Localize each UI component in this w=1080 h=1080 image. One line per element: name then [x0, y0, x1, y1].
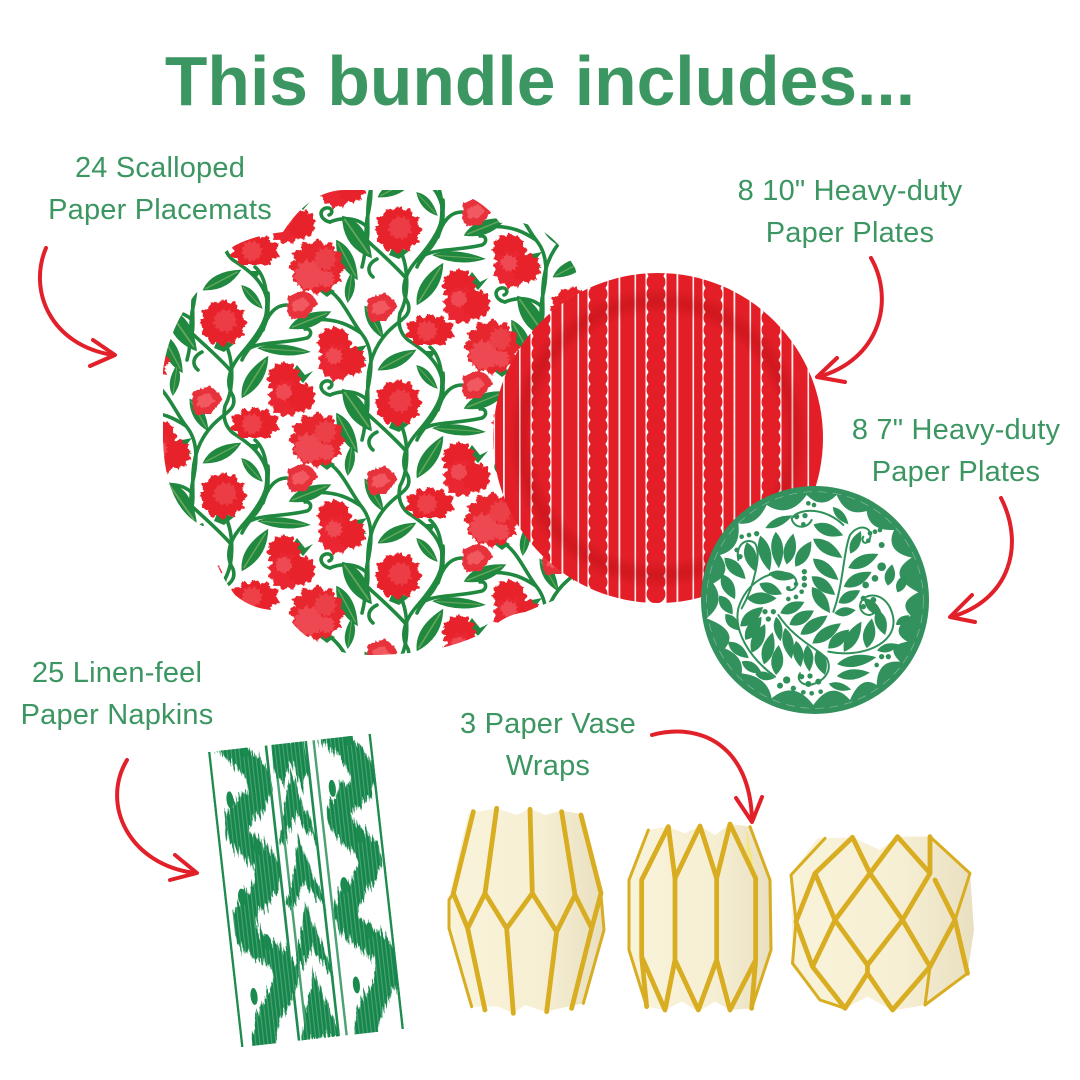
arrow: to placemats	[40, 248, 115, 366]
label: vase wraps: Wraps	[506, 750, 590, 782]
label: napkins: Paper Napkins	[21, 699, 213, 731]
arrow: to 10 inch plate	[817, 258, 882, 382]
plate: green fern 7 inch	[701, 486, 929, 714]
label: 7 inch plates: Paper Plates	[872, 456, 1040, 488]
label: 7 inch plates: 8 7" Heavy-duty	[852, 414, 1060, 446]
vase 3	[791, 837, 974, 1011]
label: placemats	[48, 152, 272, 226]
label: vase wraps	[460, 708, 636, 782]
label: 7 inch plates	[852, 414, 1060, 488]
napkin: green ikat	[207, 722, 405, 1060]
label: 10 inch plates: Paper Plates	[766, 217, 934, 249]
plate: red striped 10 inch	[490, 270, 826, 606]
label: 10 inch plates	[738, 175, 963, 249]
title: This bundle includes...	[165, 42, 915, 120]
vase 1	[449, 808, 604, 1013]
label: placemats: 24 Scalloped	[75, 152, 245, 184]
vase 2	[628, 824, 772, 1012]
label: vase wraps: 3 Paper Vase	[460, 708, 636, 740]
label: 10 inch plates: 8 10" Heavy-duty	[738, 175, 963, 207]
placemat: scalloped floral	[163, 190, 582, 655]
label: napkins	[21, 657, 213, 731]
label: napkins: 25 Linen-feel	[32, 657, 202, 689]
arrow: to vase wraps	[652, 732, 762, 822]
arrow: to 7 inch plate	[950, 498, 1012, 622]
label: placemats: Paper Placemats	[48, 194, 272, 226]
arrow: to napkins	[117, 760, 197, 880]
vase wraps group	[449, 808, 974, 1013]
